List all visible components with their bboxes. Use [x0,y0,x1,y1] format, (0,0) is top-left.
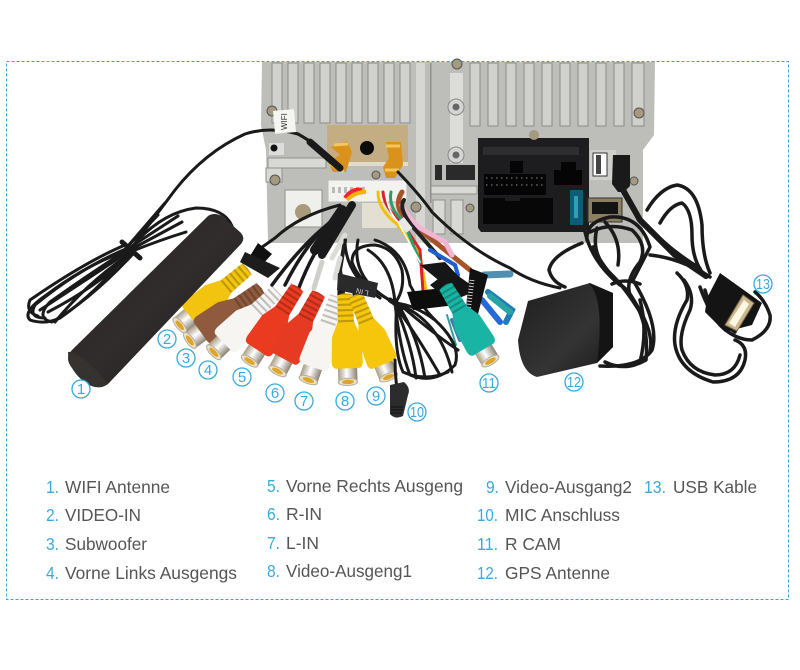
legend item 11 [477,534,561,554]
screws [267,59,644,212]
legend item 8: 8. [267,561,280,581]
legend item 6 [267,504,322,524]
head unit rear chassis [261,59,655,243]
callout 11: 11 [482,375,496,392]
callout 12: 12 [567,374,581,391]
callout 7: 7 [300,393,308,410]
GPS cable [398,172,560,288]
legend item 7: L-IN [286,533,319,553]
legend item 12: 12. [477,563,498,583]
legend item 4: Vorne Links Ausgengs [65,563,237,583]
legend item 2: 2. [46,505,59,525]
legend item 3: 3. [46,534,59,554]
callout 1: 1 [77,381,85,398]
callout 5 [233,368,251,386]
lower chassis vents [266,158,477,234]
callout 9 [367,387,385,405]
callout 3: 3 [182,350,190,367]
legend item 13: USB Kable [673,477,757,497]
callout 8 [336,392,354,410]
legend column 3 [477,477,632,583]
legend item 10: 10. [477,505,498,525]
callout 4 [199,361,217,379]
RCA plug 6 red [262,285,333,382]
GPS antenna puck [518,283,613,377]
legend item 8: Video-Ausgeng1 [286,561,412,581]
callout 13: 13 [756,276,770,293]
legend item 9: Video-Ausgang2 [505,477,632,497]
RCA plug 4 white [200,279,288,366]
legend item 12: GPS Antenne [505,563,610,583]
dashed frame [6,62,788,600]
callout numbers [72,275,772,421]
USB extension cable [623,185,770,382]
white wiring connectors [328,180,407,228]
RCA plug 8 yellow [329,293,364,386]
RCA plug 11 teal [431,277,506,372]
callout 9: 9 [372,388,380,405]
white sheathed RCA leads [314,235,345,288]
legend item 5: 5. [267,476,280,496]
microphone capsule [390,382,409,418]
legend item 6: R-IN [286,504,322,524]
legend item 5: Vorne Rechts Ausgeng [286,476,463,496]
legend item 3: Subwoofer [65,534,147,554]
SMA gold antenna connectors [328,141,403,178]
WIFI tag: WIFI [280,113,289,130]
legend item 2: VIDEO-IN [65,505,141,525]
antenna bar [68,214,243,387]
legend column 1 [46,477,237,583]
legend column 2 [267,476,463,581]
callout 2: 2 [163,331,171,348]
callout 6 [266,384,284,402]
legend item 6: 6. [267,504,280,524]
RCA plug 3 brown [178,276,271,355]
cooling fins [272,63,644,126]
USB plug into chassis [612,155,630,192]
USB ports on chassis [588,150,622,222]
cable labels L-IN and tags: L IN [356,286,369,296]
RCA plug 2 yellow [167,256,258,340]
RCA plug 7 white [292,291,352,389]
callout 4: 4 [204,362,212,379]
legend item 1: WIFI Antenne [65,477,170,497]
mounting pillar [448,73,464,163]
cable labels L-IN and tags [240,243,488,322]
head unit black connector [478,130,589,232]
colored wire bundle [378,192,512,345]
legend item 13: 13. [644,477,666,497]
callout 7 [295,392,313,410]
legend item 11: R CAM [505,534,561,554]
legend item 4: 4. [46,563,59,583]
callout 8: 8 [341,393,349,410]
callout 10: 10 [410,404,424,421]
WIFI cable and coil [28,130,340,322]
microphone cable coil [345,240,458,388]
RCA plug 9 yellow [341,289,404,386]
callout 3 [177,349,195,367]
callout 2 [158,330,176,348]
legend item 1: 1. [46,477,59,497]
gold antenna plate [327,125,408,162]
GPS cable coil [549,217,654,367]
callout 1 [72,380,90,398]
legend item 7: 7. [267,533,280,553]
black RCA breakout cables [258,205,356,305]
legend item 7 [267,533,319,553]
RCA plug 5 red [234,278,311,373]
legend item 9: 9. [486,477,499,497]
USB female connector [705,273,762,332]
legend item 10: MIC Anschluss [505,505,620,525]
legend item 11: 11. [477,534,498,554]
callout 6: 6 [271,385,279,402]
WIFI tag [273,109,296,134]
callout 5: 5 [238,369,246,386]
